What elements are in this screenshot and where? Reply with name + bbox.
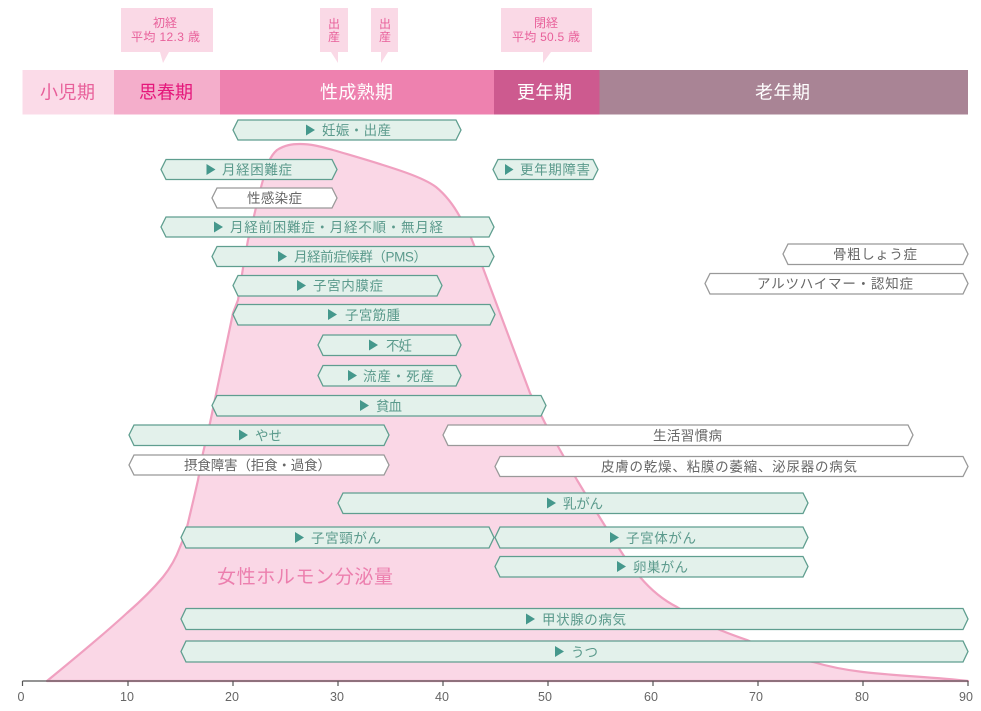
age axis: 0 [18,690,25,704]
age axis: 40 [435,690,449,704]
bar: premenstrual difficulties and irregular menstruation: 月経前困難症・月経不順・無月経 [230,219,444,235]
age axis: 30 [330,690,344,704]
bar: ovarian cancer [495,556,808,577]
bar: cervical cancer: 子宮頸がん [311,531,381,546]
hormone curve label: 女性ホルモン分泌量 [217,566,393,588]
bar: eating disorders: 摂食障害（拒食・過食） [184,458,331,473]
life stage bar [22,70,968,114]
callout: childbirth 1 [320,8,348,63]
bar: sexually transmitted infections: 性感染症 [247,190,302,206]
age axis: 10 [120,690,134,704]
age axis: 60 [644,690,658,704]
bar: Alzheimer's and dementia: アルツハイマー・認知症 [757,276,913,292]
bar: sexually transmitted infections [212,188,337,208]
callout: childbirth 1: 産 [328,30,340,44]
bar: depression [181,641,968,662]
bar: skin, mucosa and urinary disease: 皮膚の乾燥、粘膜の萎縮、泌尿器の病気 [601,460,857,474]
hormone secretion curve [47,144,968,681]
bar: pregnancy and childbirth [233,120,461,140]
age axis: 70 [749,690,763,704]
bar: cervical cancer [181,527,494,548]
age axis [18,681,973,704]
callout: menopause: 閉経 [534,16,558,30]
callout: menarche: 初経 [153,16,177,30]
bar: eating disorders [129,455,389,475]
age axis: 80 [855,690,869,704]
bar: thyroid disease [181,608,968,630]
bar: premenstrual difficulties and irregular menstruation [161,217,494,237]
callout: childbirth 1: 出 [328,17,340,31]
stage: old age: 老年期 [755,82,810,102]
callout: childbirth 2 [371,8,398,63]
stage: menopause: 更年期 [517,82,572,102]
bar: breast cancer [338,493,808,514]
bar: infertility: 不妊 [386,338,412,354]
callout: childbirth 2: 産 [379,30,391,44]
bar: uterine body cancer [495,527,808,548]
bar: osteoporosis: 骨粗しょう症 [833,247,917,262]
bar: uterine fibroids [233,304,495,325]
stage: menopause [494,70,600,114]
bar: miscarriage and stillbirth [318,366,461,386]
stage: childhood: 小児期 [40,82,95,102]
callout: menopause: 平均 50.5 歳 [512,30,580,44]
bar: menopausal disorders [493,160,598,180]
stage: reproductive age: 性成熟期 [320,82,393,102]
stage: reproductive age [220,70,494,114]
callout: childbirth 2: 出 [379,17,391,31]
bar: uterine fibroids: 子宮筋腫 [345,307,400,323]
bar: pregnancy and childbirth: 妊娠・出産 [322,123,391,138]
stage: childhood [22,70,114,114]
age axis: 20 [225,690,239,704]
bar: underweight [129,425,389,446]
bar: miscarriage and stillbirth: 流産・死産 [363,369,434,384]
bar: underweight: やせ [255,428,282,444]
bar: lifestyle diseases [443,425,913,446]
bar: dysmenorrhea: 月経困難症 [222,162,292,178]
stage: puberty [114,70,220,114]
age axis: 50 [538,690,552,704]
bar: depression: うつ [571,645,598,660]
bar: dysmenorrhea [161,160,337,180]
bar: osteoporosis [783,244,968,264]
callout: menarche [121,8,213,63]
bar: lifestyle diseases: 生活習慣病 [653,428,722,444]
bar: PMS: 月経前症候群（PMS） [294,248,427,264]
bar: anemia: 貧血 [376,399,402,414]
callout: menarche: 平均 12.3 歳 [131,30,200,44]
callout: menopause [501,8,592,63]
age axis: 90 [959,690,973,704]
bar: uterine body cancer: 子宮体がん [626,531,696,546]
bar: PMS [212,246,494,266]
bar: anemia [212,396,546,416]
bar: ovarian cancer: 卵巣がん [633,560,688,575]
bar: menopausal disorders: 更年期障害 [520,162,590,178]
bar: endometriosis: 子宮内膜症 [313,278,383,294]
bar: endometriosis [233,276,442,296]
stage: old age [600,70,968,114]
bar: Alzheimer's and dementia [705,274,968,294]
bar: breast cancer: 乳がん [563,496,603,512]
bar: infertility [318,335,461,356]
bar: skin, mucosa and urinary disease [495,456,968,476]
bar: thyroid disease: 甲状腺の病気 [542,612,626,628]
stage: puberty: 思春期 [139,82,193,102]
